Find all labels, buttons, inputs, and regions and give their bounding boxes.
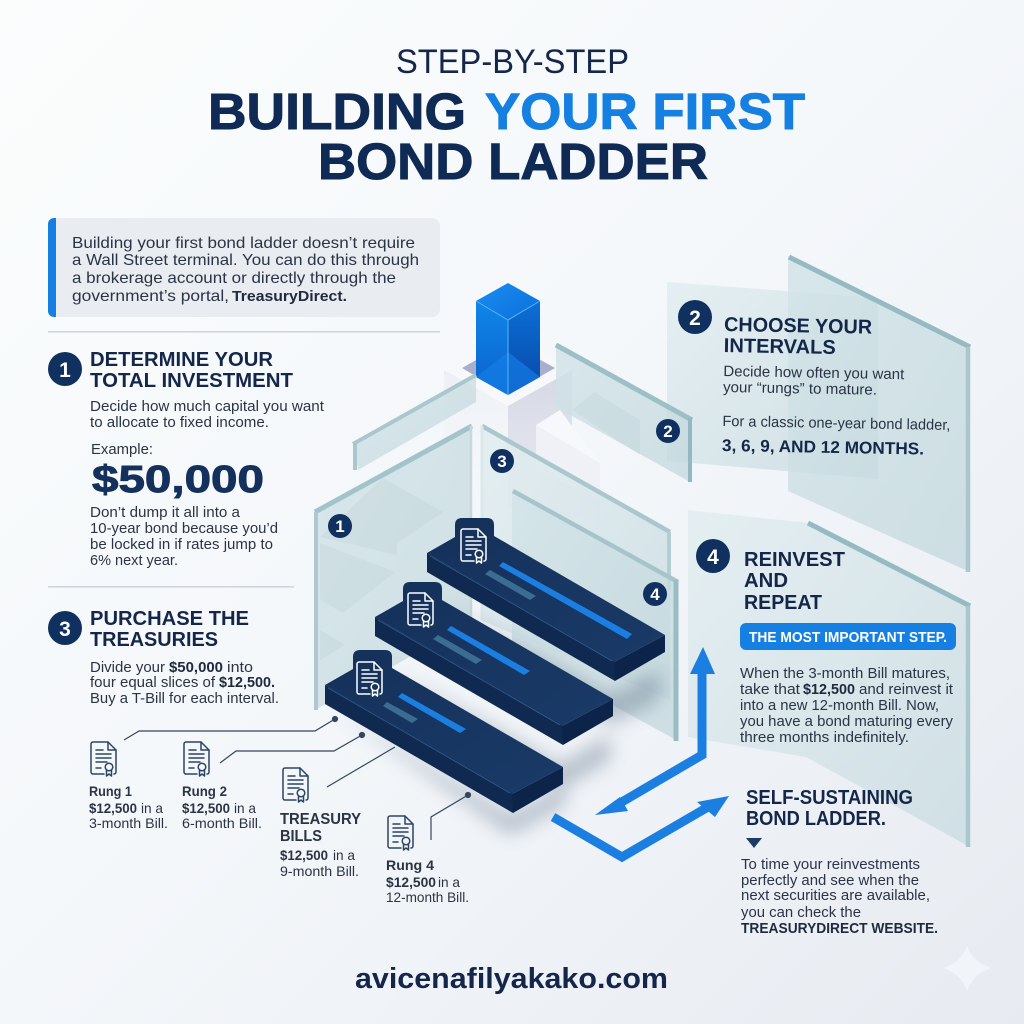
leader lines	[124, 716, 470, 840]
step 1: Don’t dump it all into a	[90, 504, 241, 521]
pedestal	[444, 334, 600, 520]
rung 4	[386, 816, 469, 905]
glass panel 3 with badge: 3	[497, 452, 507, 471]
panel: choose your intervals: 3, 6, 9, AND 12 MONTHS.	[722, 436, 924, 459]
panel: reinvest and repeat: REINVEST	[744, 549, 845, 571]
rung 3 treasury bills: in a	[333, 847, 355, 863]
step 1: to allocate to fixed income.	[90, 414, 269, 431]
panel: reinvest and repeat: take that	[740, 681, 801, 698]
panel: reinvest and repeat: 4	[707, 546, 719, 569]
footer website: avicenafilyakako.com	[355, 963, 668, 995]
panel: choose your intervals: For a classic one-year bond ladder,	[722, 413, 951, 434]
step 3: PURCHASE THE	[90, 608, 249, 630]
step 1: TOTAL INVESTMENT	[90, 370, 293, 392]
panel: choose your intervals: Decide how often you want	[723, 363, 905, 383]
rung 3 treasury bills	[280, 768, 361, 879]
intro callout: TreasuryDirect.	[232, 288, 347, 305]
arrow: reinvest cycle up and back	[595, 647, 715, 815]
glass panel 4 with badge	[512, 490, 678, 741]
rung 4: 12-month Bill.	[386, 889, 469, 905]
self-sustaining bond ladder	[741, 787, 938, 937]
step 3: Divide your	[90, 659, 165, 676]
rung 1	[89, 742, 168, 831]
panel: choose your intervals: CHOOSE YOUR	[724, 314, 873, 339]
panel: reinvest and repeat: AND	[744, 570, 788, 592]
step 1: 6% next year.	[90, 552, 178, 569]
panel: choose your intervals: INTERVALS	[724, 335, 836, 359]
self-sustaining bond ladder: BOND LADDER.	[746, 808, 886, 830]
step 1: be locked in if rates jump to	[90, 536, 273, 553]
step 1	[48, 349, 325, 569]
step 3: TREASURIES	[90, 629, 218, 651]
panel: reinvest and repeat: $12,500	[803, 681, 855, 698]
most important step pill: THE MOST IMPORTANT STEP.	[749, 629, 947, 646]
rung 1: $12,500	[89, 800, 137, 816]
self-sustaining bond ladder: perfectly and see when the	[741, 872, 919, 889]
step 3: four equal slices of	[90, 674, 216, 691]
glass panel upper right with badge 2	[556, 344, 692, 482]
panel: reinvest and repeat	[688, 510, 970, 847]
self-sustaining bond ladder: TREASURYDIRECT WEBSITE.	[741, 920, 938, 937]
glass panel 1 with badge	[314, 425, 472, 710]
glass panel upper right with badge 2: 2	[663, 422, 673, 441]
rung 4: in a	[438, 874, 460, 890]
rung 3 treasury bills: 9-month Bill.	[280, 863, 359, 879]
panel: reinvest and repeat: REPEAT	[744, 592, 822, 614]
rung 2: Rung 2	[182, 783, 227, 799]
rung 2: 6-month Bill.	[182, 815, 262, 831]
rung 3 treasury bills: $12,500	[280, 847, 328, 863]
panel: reinvest and repeat: into a new 12-month Bill. Now,	[740, 697, 939, 714]
treasury bar 2	[375, 582, 613, 745]
rung 2	[182, 742, 262, 831]
rung 4: $12,500	[386, 874, 436, 890]
most important step pill	[740, 623, 956, 650]
panel: choose your intervals: 2	[689, 307, 701, 330]
self-sustaining bond ladder: To time your reinvestments	[741, 856, 920, 873]
arrow: reinvest cycle forward	[553, 796, 729, 857]
step 3	[48, 608, 279, 707]
rung 3 treasury bills: TREASURY	[280, 811, 361, 828]
step 3: $12,500.	[219, 674, 275, 691]
self-sustaining bond ladder: next securities are available,	[741, 887, 930, 904]
step 1: Example:	[91, 441, 153, 458]
title: BOND LADDER	[318, 133, 708, 190]
step 1: DETERMINE YOUR	[90, 349, 274, 371]
title: YOUR FIRST	[485, 83, 805, 140]
rung 4: Rung 4	[386, 857, 434, 873]
glass panel 3 with badge	[481, 425, 670, 700]
rung 1: Rung 1	[89, 783, 132, 799]
title: BUILDING	[208, 83, 466, 140]
step 1: 10-year bond because you’d	[90, 520, 278, 537]
panel: choose your intervals: your “rungs” to mature.	[723, 379, 877, 399]
self-sustaining bond ladder: SELF-SUSTAINING	[746, 787, 913, 809]
glass panel 4 with badge: 4	[650, 585, 660, 604]
bar shadows	[330, 600, 660, 835]
panel: reinvest and repeat: you have a bond maturing every	[740, 713, 953, 730]
step 3: into	[227, 659, 253, 676]
rung 2: $12,500	[182, 800, 230, 816]
panel: reinvest and repeat: and reinvest it	[859, 681, 954, 698]
step 3: $50,000	[169, 659, 223, 676]
rung 2: in a	[234, 800, 256, 816]
title: STEP-BY-STEP	[396, 43, 629, 81]
intro callout: Building your first bond ladder doesn’t require	[72, 235, 415, 252]
glass bar upper left	[353, 375, 476, 470]
step 3: Buy a T-Bill for each interval.	[90, 690, 279, 707]
step 1: 1	[59, 359, 71, 382]
intro callout: a Wall Street terminal. You can do this through	[72, 252, 419, 269]
glass panel 1 with badge: 1	[335, 517, 345, 536]
step 3: 3	[59, 618, 71, 641]
panel: choose your intervals	[667, 256, 970, 572]
treasury bar 1	[325, 650, 563, 813]
rung 1: 3-month Bill.	[89, 815, 168, 831]
step 1: $50,000	[92, 459, 264, 501]
panel: reinvest and repeat: When the 3-month Bill matures,	[740, 665, 950, 682]
intro callout: a brokerage account or directly through the	[72, 270, 396, 287]
self-sustaining bond ladder: you can check the	[741, 904, 861, 921]
treasury bar 3	[427, 518, 665, 681]
title	[208, 43, 805, 190]
rung 3 treasury bills: BILLS	[280, 828, 322, 845]
panel: reinvest and repeat: three months indefinitely.	[740, 729, 909, 746]
step 1: Decide how much capital you want	[90, 398, 325, 415]
intro callout: government’s portal,	[72, 288, 229, 305]
rung 1: in a	[141, 800, 163, 816]
intro callout	[48, 218, 440, 317]
blue cube	[476, 283, 540, 395]
icon: sparkle	[943, 945, 991, 992]
